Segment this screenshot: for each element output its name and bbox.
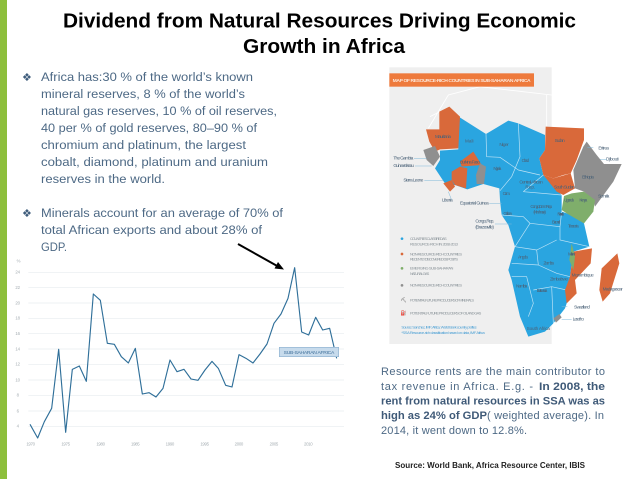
country labels: Eritrea xyxy=(598,145,609,150)
axis labels: 22 xyxy=(15,285,21,290)
country labels: Tanzania xyxy=(568,224,579,229)
axis labels: 16 xyxy=(15,331,21,336)
accent bar xyxy=(0,0,7,479)
axis labels: 1990 xyxy=(166,441,175,446)
text block: reserves bullet: reserves in the world. xyxy=(41,172,165,186)
axis labels: 2010 xyxy=(304,441,313,446)
axis labels: 10 xyxy=(15,377,21,382)
source line: Source: World Bank, Africa Resource Center, IBIS xyxy=(395,460,585,470)
countries: grey group xyxy=(423,142,622,323)
text block: resource rents: tax revenue in Africa. E.g. - xyxy=(381,381,533,393)
map heading xyxy=(389,73,534,87)
country labels: The Gambia xyxy=(393,156,414,161)
text block: resource rents: ( weighted average). In xyxy=(487,410,604,422)
country labels: (Kinshasa) xyxy=(533,209,546,214)
axis labels: 20 xyxy=(15,300,21,305)
map legend: *SSA Resource-rich classification based on data, IMF Africa xyxy=(401,330,485,335)
country labels: Ethiopia xyxy=(582,175,594,180)
axis labels xyxy=(15,259,313,446)
text block: resource rents: In 2008, the xyxy=(539,381,605,393)
country labels: Zimbabwe xyxy=(550,277,568,282)
map legend: RESOURCE-RICH IN 2008-2013 xyxy=(410,241,459,246)
map legend: NON-RESOURCE-RICH COUNTRIES xyxy=(410,251,462,256)
country labels: Sierra Leone xyxy=(403,177,424,182)
country labels: Madagascar xyxy=(603,287,623,292)
map legend xyxy=(401,236,485,335)
axis labels: 8 xyxy=(17,393,20,398)
text block: minerals bullet: total African exports and about 28% of xyxy=(41,223,263,237)
country labels: Swaziland xyxy=(574,304,590,309)
country labels xyxy=(393,134,623,331)
text block: reserves bullet: chromium and platinum, the largest xyxy=(41,138,247,152)
country labels: Guinea-Bissau xyxy=(393,163,414,168)
map leader lines xyxy=(414,147,607,319)
countries: non-resource-rich borders xyxy=(486,123,589,323)
axis labels: 1985 xyxy=(131,441,140,446)
axis labels: % xyxy=(17,259,21,264)
map legend: NON-RESOURCE-RICH COUNTRIES xyxy=(410,283,462,288)
country labels: Congo, Dem. Rep. xyxy=(530,204,553,209)
country labels: Uganda xyxy=(564,198,574,203)
country labels: Djibouti xyxy=(606,157,619,162)
series label xyxy=(279,347,339,357)
country labels: Lesotho xyxy=(573,317,584,322)
axis labels: 1975 xyxy=(61,441,71,446)
country labels: Central African xyxy=(519,179,543,184)
map legend: RECENTLY DISCOVERED DEPOSITS xyxy=(410,257,458,262)
country labels: (Brazzaville) xyxy=(475,224,494,229)
text block: resource rents: Resource rents are the main contributor to xyxy=(381,366,605,378)
text block: minerals bullet: ❖ xyxy=(22,207,32,220)
country labels: Zambia xyxy=(543,261,554,266)
map legend: POTENTIAL FUTURE PRODUCERS OF MINERALS xyxy=(410,297,474,302)
country labels: Niger xyxy=(499,142,509,147)
line chart: resource rents as share of GDP xyxy=(15,259,344,446)
country labels: Burundi xyxy=(552,219,561,224)
north africa outline xyxy=(428,87,552,128)
country labels: Gabon xyxy=(503,211,512,216)
map legend: ⛏ xyxy=(401,297,407,302)
series label: SUB-SAHARAN AFRICA xyxy=(284,350,335,356)
country labels: Somalia xyxy=(598,193,610,198)
axis labels: 1995 xyxy=(200,441,210,446)
country labels: Sudan xyxy=(555,138,565,143)
text block: reserves bullet: 40 per % of gold reserves, 80–90 % of xyxy=(41,121,258,135)
countries: resource-rich xyxy=(435,115,589,337)
axis labels: 2000 xyxy=(235,441,244,446)
country labels: Mauritania xyxy=(435,134,451,139)
data line xyxy=(30,268,337,438)
axis labels: 18 xyxy=(15,316,21,321)
text block: reserves bullet xyxy=(22,70,277,186)
country labels: Nigeria xyxy=(493,166,502,171)
axis labels: 1970 xyxy=(26,441,36,446)
text block: minerals bullet: GDP. xyxy=(41,240,67,254)
title: Growth in Africa xyxy=(243,35,406,58)
axis labels: 6 xyxy=(17,408,20,413)
country labels: Congo, Rep. xyxy=(475,219,494,224)
text block: minerals bullet: Minerals account for an average of 70% of xyxy=(41,206,284,220)
text block: resource rents: 2014, it went down to 12.8%. xyxy=(381,425,527,437)
country labels: Burkina Faso xyxy=(460,160,480,165)
arrow xyxy=(238,244,284,270)
map legend: EMERGING SUB-SAHARAN xyxy=(410,266,453,271)
map heading: MAP OF RESOURCE-RICH COUNTRIES IN SUB-SAHARAN AFRICA xyxy=(393,78,531,84)
text block: resource rents: rent from natural resources in SSA was as xyxy=(381,396,605,408)
map legend: POTENTIAL FUTURE PRODUCERS OF OIL AND GAS xyxy=(410,311,482,316)
country labels: Kenya xyxy=(579,197,588,202)
country labels: Chad xyxy=(522,158,529,163)
country labels: South Sudan xyxy=(554,185,575,190)
text block: reserves bullet: ❖ xyxy=(22,71,32,84)
axis labels: 1980 xyxy=(96,441,106,446)
axis labels: 12 xyxy=(15,362,21,367)
title: Dividend from Natural Resources Driving Economic xyxy=(63,10,576,32)
axis labels: 4 xyxy=(17,424,20,429)
country labels: South Africa xyxy=(527,326,550,331)
country labels: Rep. xyxy=(525,185,535,190)
text block: minerals bullet xyxy=(22,206,284,254)
text block: reserves bullet: cobalt, diamond, platinum and uranium xyxy=(41,155,268,169)
countries: green group xyxy=(562,192,595,270)
country labels: Mozambique xyxy=(572,273,594,278)
country labels: Equatorial Guinea xyxy=(460,201,489,206)
country labels: Malawi xyxy=(568,251,576,256)
axis labels: 2005 xyxy=(270,441,279,446)
country labels: Cam. xyxy=(503,191,510,196)
map legend: COUNTRIES CLASSIFIED AS xyxy=(410,236,447,241)
text block: resource rents: high as 24% of GDP xyxy=(381,410,487,422)
country labels: Namibia xyxy=(516,283,528,288)
axis labels: 14 xyxy=(15,346,21,351)
country labels: Liberia xyxy=(442,197,453,202)
text block: reserves bullet: natural gas reserves, 10 % of oil reserves, xyxy=(41,104,277,118)
map legend: NATURAL GAS xyxy=(410,271,430,276)
map legend: Source: Sanchez, IMF; Africa, World Bank country profiles xyxy=(401,325,477,330)
text block: reserves bullet: Africa has:30 % of the world’s known xyxy=(41,70,253,84)
map: resource-rich countries in Sub-Saharan Africa xyxy=(389,67,623,344)
axis labels: 24 xyxy=(15,270,21,275)
title xyxy=(63,10,576,58)
country labels: Mali xyxy=(465,138,474,143)
map legend: ⛽ xyxy=(401,310,407,317)
text block: reserves bullet: mineral reserves, 8 % of the world’s xyxy=(41,87,245,101)
country labels: Angola xyxy=(518,255,528,260)
text block: resource rents xyxy=(381,366,605,437)
countries: orange group xyxy=(426,107,619,303)
country labels: Rwanda xyxy=(557,211,564,216)
country labels: Botswana xyxy=(537,288,548,293)
